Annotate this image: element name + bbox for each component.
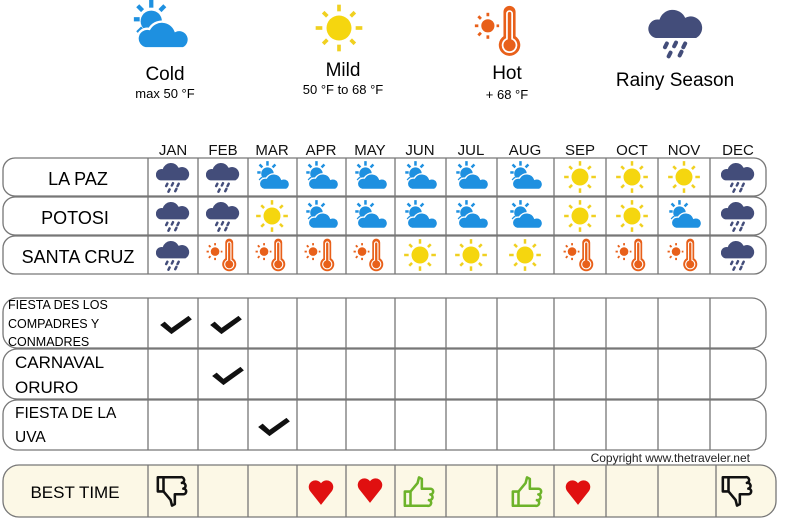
month headers: MAY (354, 142, 386, 159)
row: La Paz (48, 161, 754, 193)
legend: rainy season: Rainy Season (616, 70, 734, 91)
month headers: SEP (565, 142, 595, 159)
festivals table (3, 298, 766, 450)
month headers: MAR (255, 142, 289, 159)
legend: cold (134, 0, 195, 101)
legend: cold: Cold (145, 64, 185, 85)
legend: hot (475, 6, 528, 102)
month headers: AUG (509, 142, 541, 159)
row: La Paz: LA PAZ (48, 169, 108, 189)
legend: mild: Mild (326, 60, 360, 81)
festival: Fiesta de la Uva (15, 405, 290, 446)
row: Santa Cruz (22, 239, 754, 271)
festival: Fiesta des los Compadres: CONMADRES (8, 335, 89, 349)
legend: rainy season (616, 10, 734, 91)
festival: Fiesta de la Uva: UVA (15, 429, 46, 446)
copyright: Copyright www.thetraveler.net (591, 451, 751, 465)
legend: hot: + 68 °F (486, 87, 528, 102)
month headers: JUN (405, 142, 435, 159)
festival: Fiesta des los Compadres: COMPADRES Y (8, 317, 100, 331)
month headers: FEB (208, 142, 238, 159)
month headers (159, 142, 754, 159)
row: Potosi: POTOSI (41, 208, 109, 228)
festival: Carnaval Oruro: ORURO (15, 378, 78, 397)
festival: Fiesta des los Compadres (8, 298, 242, 349)
row: Santa Cruz: SANTA CRUZ (22, 247, 134, 267)
month headers: APR (306, 142, 337, 159)
best time row (3, 465, 776, 517)
month headers: DEC (722, 142, 754, 159)
festival: Carnaval Oruro (15, 353, 244, 397)
weather table (3, 158, 766, 274)
month headers: JAN (159, 142, 187, 159)
month headers: NOV (668, 142, 700, 159)
festival: Carnaval Oruro: CARNAVAL (15, 353, 104, 372)
legend: hot: Hot (492, 63, 522, 84)
legend: mild (303, 5, 383, 97)
festival: Fiesta de la Uva: FIESTA DE LA (15, 405, 117, 422)
best time row: BEST TIME (30, 483, 120, 502)
month headers: OCT (616, 142, 648, 159)
row: Potosi (41, 200, 754, 232)
legend: cold: max 50 °F (135, 86, 195, 101)
legend: mild: 50 °F to 68 °F (303, 82, 383, 97)
month headers: JUL (458, 142, 484, 159)
festival: Fiesta des los Compadres: FIESTA DES LOS (8, 298, 108, 312)
